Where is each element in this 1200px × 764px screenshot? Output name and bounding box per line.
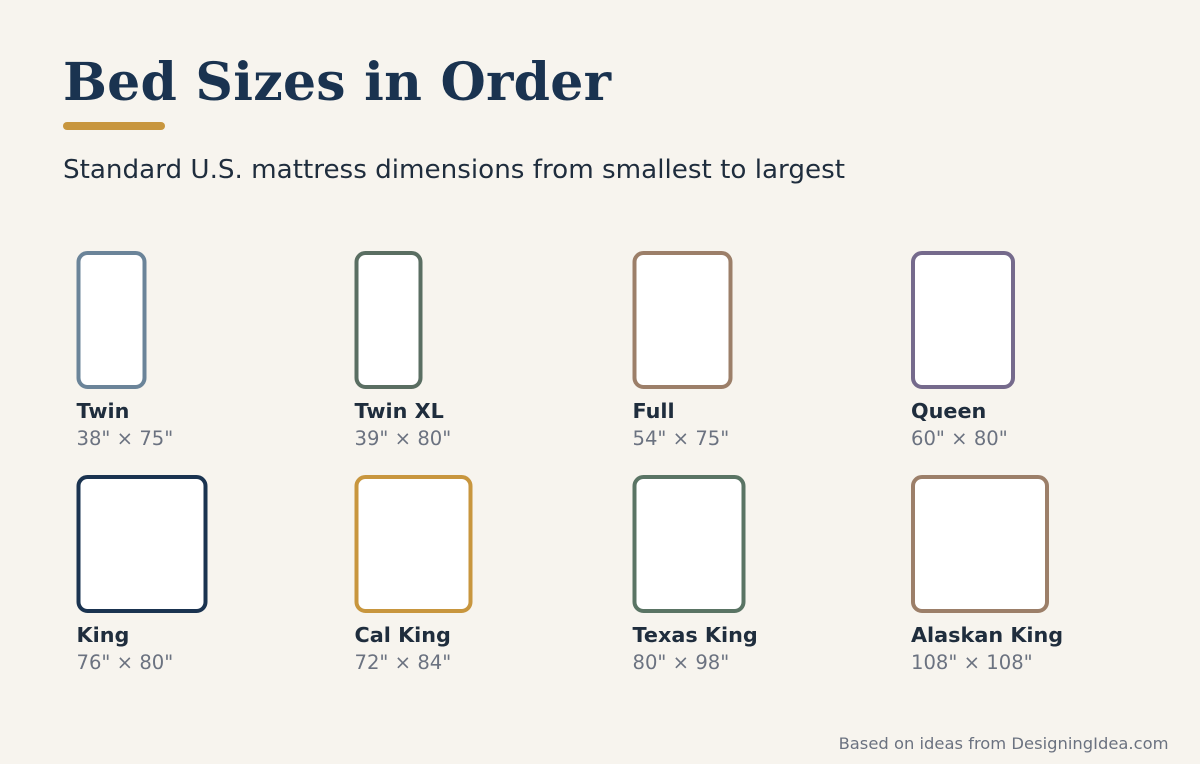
card: Twin <box>76 253 173 450</box>
card: Queen: 60" × 80" <box>911 427 1008 450</box>
card: King: 76" × 80" <box>76 651 173 674</box>
card: King: King <box>76 623 129 647</box>
title underline <box>63 122 165 130</box>
card: Twin XL: Twin XL <box>354 399 444 423</box>
card: Texas King <box>632 477 758 674</box>
card: Alaskan King <box>911 477 1063 674</box>
card: Queen: Queen <box>911 399 986 423</box>
source credit: Based on ideas from DesigningIdea.com <box>839 734 1168 753</box>
card: Queen <box>911 253 1013 450</box>
card: Full: 54" × 75" <box>632 427 729 450</box>
card: Twin XL <box>354 253 451 450</box>
card: Texas King: 80" × 98" <box>632 651 729 674</box>
card: Twin XL: 39" × 80" <box>354 427 451 450</box>
card: Cal King: 72" × 84" <box>354 651 451 674</box>
card: Cal King: Cal King <box>354 623 451 647</box>
card: Alaskan King: Alaskan King <box>911 623 1063 647</box>
card: Full <box>632 253 730 450</box>
card: Alaskan King: 108" × 108" <box>911 651 1033 674</box>
card: Cal King <box>354 477 470 674</box>
card: Texas King: Texas King <box>632 623 758 647</box>
title: Bed Sizes in Order <box>63 52 612 113</box>
card: Twin: 38" × 75" <box>76 427 173 450</box>
card: King <box>76 477 206 674</box>
card: Full: Full <box>632 399 675 423</box>
card: Twin: Twin <box>76 399 129 423</box>
subtitle: Standard U.S. mattress dimensions from smallest to largest <box>63 155 845 185</box>
